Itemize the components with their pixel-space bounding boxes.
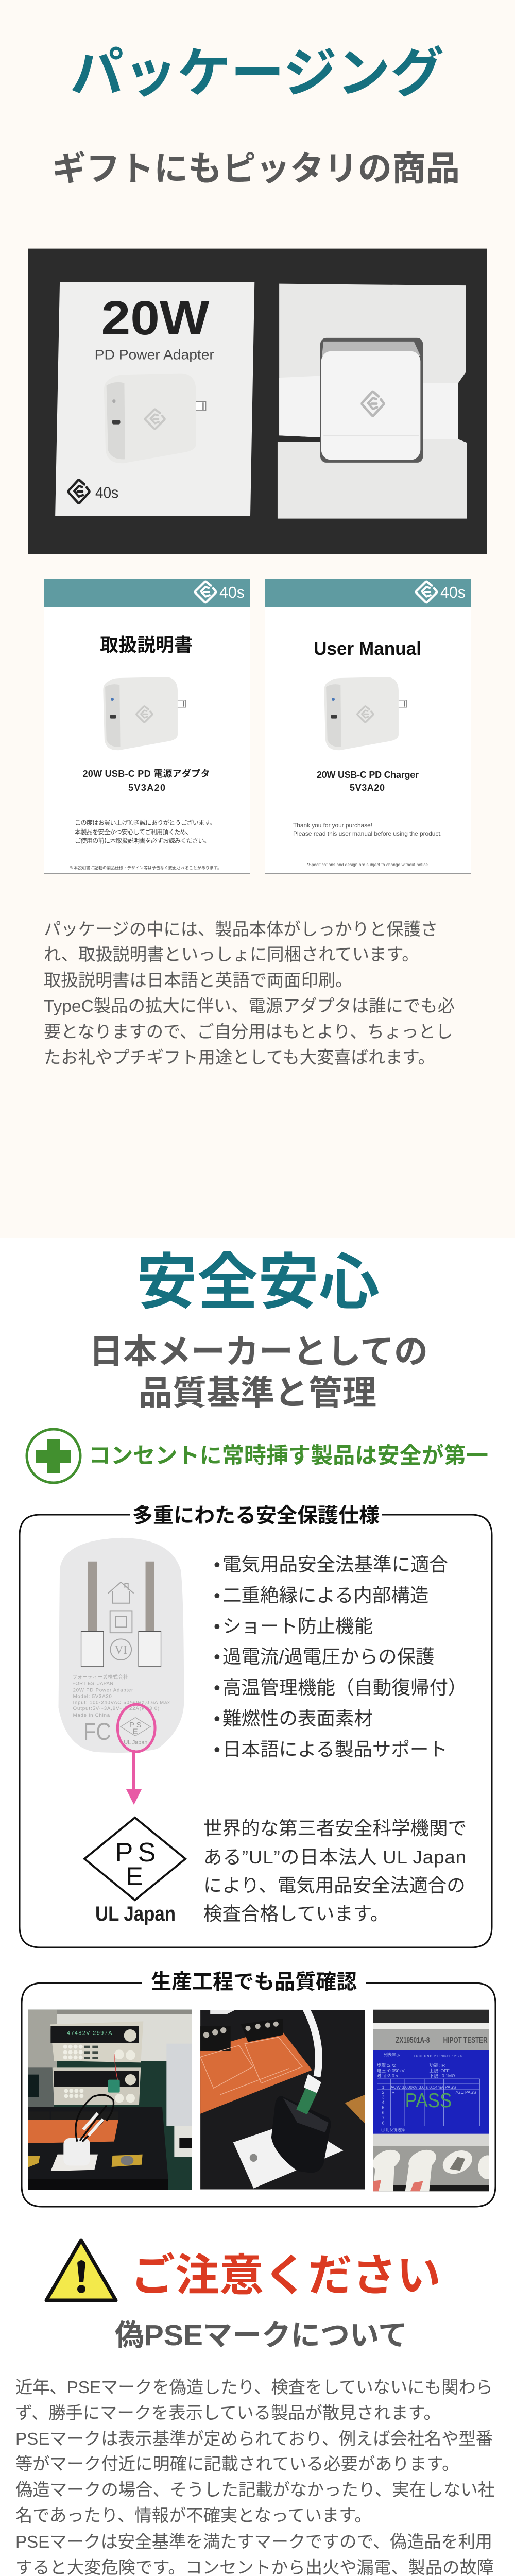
panel: English manual cover: *Specifications and design are subject to change without notice (307, 862, 428, 867)
text block: UL Japan inspection (203, 1818, 467, 1924)
product photo: adapter back with PSE mark: Input: 100-240VAC 50/60Hz,0.6A Max (73, 1700, 170, 1706)
arrow: to PSE mark (126, 1750, 142, 1805)
bullet list: safety features: 高温管理機能（自動復帰付） (222, 1677, 467, 1698)
text block: fake PSE explanation (15, 2378, 495, 2576)
photo: retail box and insert on dark background: 20W (101, 291, 210, 345)
panel: Japanese manual cover (44, 579, 250, 874)
photo: HIPOT tester showing PASS: 7GΩ PASS (455, 2090, 476, 2095)
bullet list: safety features: • (214, 1585, 220, 1606)
text block: UL Japan inspection: 検査合格しています。 (203, 1903, 389, 1924)
text block: fake PSE explanation: 偽造マークの場合、そうした記載がなかったり、実在しない社 (15, 2481, 495, 2500)
product photo: adapter back with PSE mark: Output:5V⎓3A,9V⎓2.22A(PD3.0) (73, 1706, 159, 1711)
panel: English manual cover: 5V3A20 (350, 783, 385, 793)
text block: UL Japan inspection: により、電気用品安全法適合の (203, 1875, 466, 1896)
product photo: adapter back with PSE mark: VI (115, 1643, 127, 1656)
panel: Japanese manual cover: 20W USB-C PD 電源アダプタ (82, 768, 210, 779)
panel: production quality check (22, 1971, 497, 2207)
photo: HIPOT tester showing PASS (369, 2010, 497, 2191)
panel: Japanese manual cover: 取扱説明書 (100, 634, 193, 655)
subtitle: quality standards: 品質基準と管理 (139, 1374, 376, 1412)
photo: HIPOT tester showing PASS: ① 用反键选择 (381, 2128, 405, 2132)
photo: HIPOT tester showing PASS: 1 (382, 2084, 385, 2090)
panel: multi-layer safety specifications (20, 1504, 492, 1947)
text block: UL Japan inspection: 世界的な第三者安全科学機関で (203, 1818, 467, 1839)
text block: package description: たお礼やプチギフト用途としても大変喜ばれます。 (44, 1048, 435, 1067)
product photo: adapter back with PSE mark: FC (83, 1718, 111, 1745)
photo: HIPOT tester showing PASS: PASS (405, 2089, 452, 2112)
panel: Japanese manual cover: 本製品を安全かつ安心してご利用頂くため、 (75, 828, 192, 836)
product photo: adapter back with PSE mark: P S (129, 1721, 142, 1730)
icon: PSE UL Japan mark: E (126, 1862, 143, 1891)
product photo: adapter back with PSE mark: Made in China (73, 1713, 110, 1718)
icon: green cross (27, 1429, 80, 1483)
text block: fake PSE explanation: 等がマーク付近に明確に記載されている必要があります。 (15, 2455, 459, 2474)
subtitle: perfect for gifts: ギフトにもピッタリの商品 (52, 149, 460, 188)
panel: English manual cover: 20W USB-C PD Charger (317, 770, 419, 780)
bullet list: safety features: • (214, 1554, 220, 1575)
photo: HIPOT tester showing PASS: 下限 : 0.1MΩ (429, 2073, 455, 2078)
photo: HIPOT tester showing PASS: 6 (382, 2110, 385, 2115)
photo: power test bench (28, 2010, 192, 2190)
bullet list: safety features: 過電流/過電圧からの保護 (222, 1646, 435, 1667)
text block: fake PSE explanation: 名であったり、情報が不確実となっています。 (15, 2506, 372, 2526)
text block: package description: TypeC製品の拡大に伴い、電源アダプタは誰にでも必 (44, 997, 455, 1016)
photo: HIPOT tester showing PASS: 5 (382, 2105, 385, 2110)
product photo: adapter back with PSE mark (59, 1538, 184, 1753)
photo: HIPOT tester showing PASS: 7 (382, 2115, 385, 2120)
product photo: adapter back with PSE mark: FORTIES. JAPAN (72, 1681, 113, 1687)
product photo: adapter back with PSE mark: フォーティーズ株式会社 (72, 1674, 128, 1680)
icon: PSE UL Japan mark: UL Japan (95, 1903, 176, 1925)
panel: English manual cover: User Manual (314, 638, 421, 659)
bullet list: safety features: 二重絶縁による内部構造 (222, 1585, 428, 1606)
text block: fake PSE explanation: PSEマークは表示基準が定められており、例えば会社名や型番 (15, 2430, 493, 2449)
subtitle: quality standards: 日本メーカーとしての (89, 1332, 428, 1370)
bullet list: safety features (214, 1554, 467, 1760)
photo: HIPOT tester showing PASS: 2 (382, 2090, 385, 2095)
panel: Japanese manual cover: ご使用の前に本取扱説明書を必ずお読みください。 (75, 837, 210, 844)
subheading: fake PSE mark: 偽PSEマークについて (115, 2319, 407, 2352)
photo: retail box and insert on dark background: 40s (95, 484, 118, 502)
photo: HIPOT tester showing PASS: 功能 :IR (429, 2062, 445, 2068)
product photo: adapter back with PSE mark: UL Japan (124, 1739, 147, 1745)
photo: HIPOT tester showing PASS: HIPOT TESTER (443, 2036, 488, 2045)
subtitle: quality standards (89, 1332, 428, 1412)
panel: English manual cover: Thank you for your purchase! (293, 822, 372, 829)
photo: HIPOT tester showing PASS: ACW 3.000kV 3.0 s 0.14mA PASS (390, 2084, 456, 2090)
photo: HIPOT tester showing PASS: LUCHONG 218/06/1 12:26 (414, 2055, 462, 2058)
text block: fake PSE explanation: ず、勝手にマークを表示している製品が散見されます。 (15, 2404, 441, 2423)
bullet list: safety features: • (214, 1616, 220, 1637)
bullet list: safety features: • (214, 1739, 220, 1760)
panel title: 多重にわたる安全保護仕様 (132, 1504, 380, 1527)
text block: fake PSE explanation: 近年、PSEマークを偽造したり、検査をしていないにも関わら (15, 2378, 493, 2397)
icon: PSE UL Japan mark: P (115, 1838, 133, 1868)
photo: HIPOT tester showing PASS: 时间 :3.0 s (377, 2073, 398, 2078)
product photo: adapter back with PSE mark: Model: 5V3A20 (73, 1693, 112, 1699)
title: packaging: パッケージング (70, 44, 444, 104)
panel: Japanese manual cover: 5V3A20 (128, 783, 165, 793)
panel: English manual cover: 40s (440, 583, 466, 601)
icon: PSE UL Japan mark: S (138, 1838, 156, 1868)
text block: package description: 取扱説明書は日本語と英語で両面印刷。 (44, 971, 352, 990)
product photo: adapter back with PSE mark: E (133, 1728, 138, 1736)
heading: caution: ご注意ください (131, 2251, 441, 2300)
photo: HIPOT tester showing PASS: IR (390, 2090, 395, 2095)
text block: package description (44, 920, 455, 1067)
panel: English manual cover (265, 579, 471, 874)
photo: HIPOT tester showing PASS: 上限 :OFF (429, 2068, 450, 2073)
photo: HIPOT tester showing PASS: ZX19501A-8 (396, 2036, 430, 2045)
text block: package description: パッケージの中には、製品本体がしっかりと保護さ (44, 920, 438, 939)
background: package section (0, 0, 515, 1238)
panel: Japanese manual cover: この度はお買い上げ頂き誠にありがとうございます。 (75, 819, 216, 826)
photo: HIPOT tester showing PASS: 电压 :0.050kV (377, 2067, 405, 2073)
panel: Japanese manual cover: ※本説明書に記載の製品仕様・デザイン等は予告なく変更されることがあります。 (70, 865, 221, 870)
bullet list: safety features: 電気用品安全法基準に適合 (222, 1554, 448, 1575)
bullet list: safety features: 日本語による製品サポート (222, 1739, 448, 1760)
bullet list: safety features: • (214, 1708, 220, 1729)
photo: power test bench: 47482V 2997A (67, 2030, 112, 2036)
photo: HIPOT tester showing PASS: 步骤 :2 /2 (377, 2062, 396, 2068)
photo: HIPOT tester showing PASS: 8 (382, 2120, 385, 2125)
panel title: 生産工程でも品質確認 (151, 1971, 357, 1993)
text block: UL Japan inspection: ある”UL”の日本法人 UL Japan (203, 1846, 466, 1868)
heading: safety first: コンセントに常時挿す製品は安全が第一 (89, 1444, 488, 1468)
photo: HIPOT tester showing PASS: 列表显示 (384, 2052, 400, 2057)
photo: HIPOT tester showing PASS: 4 (382, 2099, 385, 2105)
text block: package description: れ、取扱説明書といっしょに同梱されています。 (44, 945, 419, 964)
photo: HIPOT tester showing PASS: 3 (382, 2094, 385, 2099)
photo: retail box and insert on dark background (28, 249, 487, 554)
bullet list: safety features: 難燃性の表面素材 (222, 1708, 373, 1729)
panel: English manual cover: Please read this user manual before using the product. (293, 830, 442, 837)
bullet list: safety features: • (214, 1677, 220, 1698)
photo: retail box and insert on dark background: PD Power Adapter (95, 347, 214, 363)
bullet list: safety features: ショート防止機能 (222, 1616, 373, 1637)
title: safety and peace of mind: 安全安心 (136, 1249, 380, 1317)
text block: package description: 要となりますので、ご自分用はもとより、ちょっとし (44, 1023, 453, 1042)
panel: Japanese manual cover: 40s (219, 583, 245, 601)
text block: fake PSE explanation: PSEマークは安全基準を満たすマークですので、偽造品を利用 (15, 2533, 492, 2552)
product photo: adapter back with PSE mark: 20W PD Power Adapter (73, 1687, 133, 1693)
icon: warning triangle (46, 2240, 116, 2300)
icon: PSE UL Japan mark (84, 1818, 185, 1925)
bullet list: safety features: • (214, 1646, 220, 1667)
photo: adapter on PCB fixture (200, 2008, 365, 2190)
